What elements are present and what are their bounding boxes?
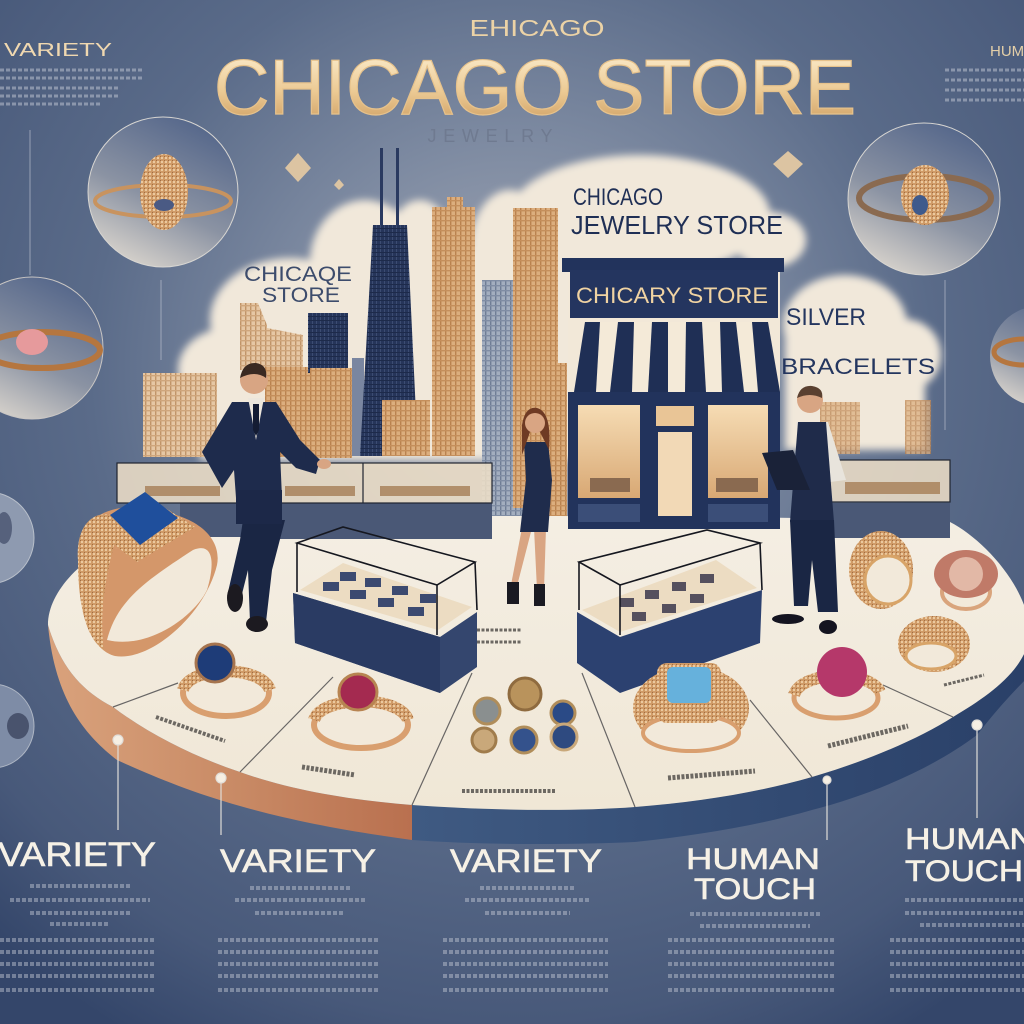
- platform top surface: [48, 516, 1024, 810]
- person: woman center: [507, 408, 552, 606]
- column: human touch 2: HUMAN: [905, 823, 1024, 856]
- person: man left: [202, 363, 331, 632]
- silver bracelets label: [781, 304, 935, 379]
- header right: notes: [945, 43, 1024, 100]
- header left: variety: VARIETY: [4, 40, 112, 60]
- storefront: [562, 258, 784, 529]
- platform side: rust: [48, 625, 412, 840]
- column: human touch 1: TOUCH: [694, 873, 816, 906]
- platform segment captions: [156, 630, 984, 791]
- column: human touch 1: HUMAN: [686, 843, 820, 876]
- striped awning: [574, 322, 780, 392]
- header right: notes: HUM: [990, 43, 1024, 60]
- subtitle jewelry: JEWELRY: [428, 126, 552, 146]
- column: variety 3: VARIETY: [450, 843, 602, 879]
- connector pins: [113, 720, 982, 840]
- storefront heading: CHICAGO: [573, 184, 663, 211]
- skyline labels: CHICAQE: [244, 263, 352, 286]
- diamonds decoration: [285, 151, 803, 190]
- person: man right: [762, 386, 846, 634]
- gem group: [472, 678, 577, 753]
- ring: pink: [794, 647, 880, 718]
- clouds: [178, 155, 941, 460]
- connector lines decorative: [30, 130, 945, 430]
- ring: rose: [934, 550, 998, 609]
- display case: front left: [293, 527, 477, 693]
- column: human touch 2: [890, 823, 1024, 990]
- ring: aqua square: [633, 663, 749, 751]
- platform dividers: [113, 673, 953, 807]
- storefront heading: JEWELRY STORE: [571, 210, 783, 240]
- back display cases: [117, 460, 950, 539]
- column: variety 1: VARIETY: [0, 836, 156, 874]
- column: human touch 2: TOUCH: [905, 855, 1023, 888]
- silver bracelets label: SILVER: [786, 304, 866, 331]
- ring: gold lower: [898, 616, 970, 672]
- silver bracelets label: BRACELETS: [781, 354, 935, 379]
- shop windows: [578, 405, 640, 498]
- platform: [48, 516, 1024, 844]
- platform side: navy: [412, 635, 1024, 844]
- bubble: top left ring: [88, 117, 238, 267]
- chicago skyline: [143, 148, 931, 518]
- bubble: top right ring: [848, 123, 1000, 275]
- bubble: left lower: [0, 492, 34, 584]
- title: CHICAGO STORE: [214, 43, 856, 131]
- bubble: left middle ring: [0, 277, 103, 419]
- ring: red: [314, 674, 408, 748]
- store sign: CHICARY STORE: [576, 283, 768, 308]
- skyline labels: [244, 263, 352, 307]
- column: variety 2: VARIETY: [220, 843, 376, 879]
- ring: gold top: [849, 531, 913, 609]
- ring: large blue: [78, 492, 218, 657]
- bubble: left bottom: [0, 684, 34, 768]
- skyline labels: STORE: [262, 284, 340, 307]
- bubble: right middle ring: [990, 306, 1024, 406]
- storefront heading: [571, 184, 783, 240]
- display case: front right: [577, 530, 762, 693]
- column: human touch 1: [668, 843, 835, 990]
- top eyebrow text: EHICAGO: [470, 15, 604, 41]
- ring: small blue: [183, 644, 270, 716]
